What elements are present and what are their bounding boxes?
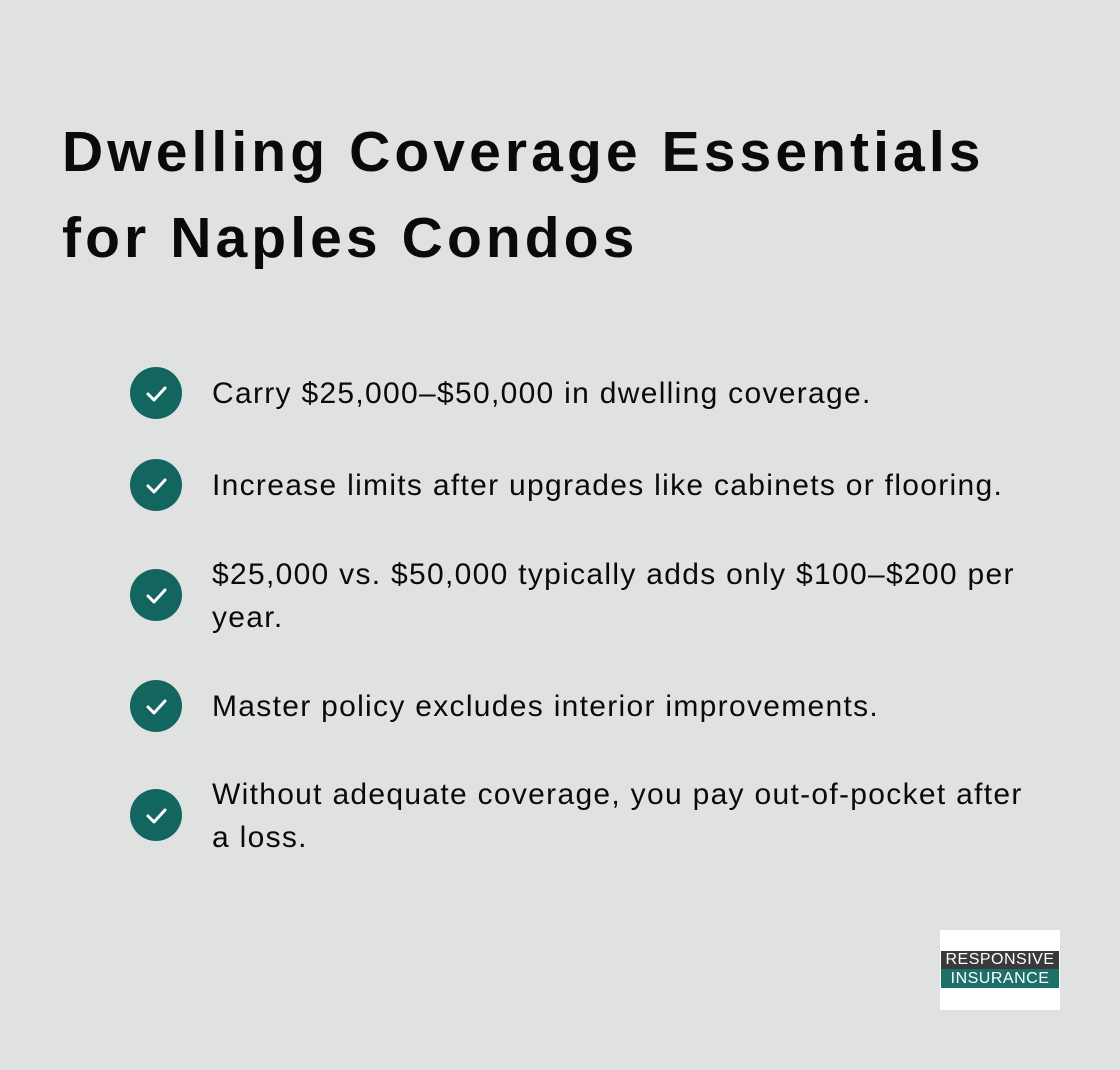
icon: check	[130, 789, 182, 841]
item 2	[130, 459, 1003, 511]
logo: RESPONSIVE	[945, 951, 1055, 968]
item 1	[130, 367, 872, 419]
item 3	[130, 558, 1015, 634]
text: Carry $25,000–$50,000 in dwelling coverage.	[212, 377, 872, 410]
icon: check	[130, 680, 182, 732]
text: Master policy excludes interior improvements.	[212, 690, 879, 723]
title: for Naples Condos	[62, 206, 638, 270]
title	[62, 120, 985, 270]
text: $25,000 vs. $50,000 typically adds only $100–$200 per year.	[212, 558, 1015, 634]
icon: check	[130, 459, 182, 511]
icon: check	[130, 569, 182, 621]
text: Without adequate coverage, you pay out-of-pocket after a loss.	[212, 778, 1023, 854]
text: Increase limits after upgrades like cabinets or flooring.	[212, 469, 1003, 502]
logo: INSURANCE	[951, 970, 1049, 987]
logo	[940, 930, 1060, 1010]
icon: check	[130, 367, 182, 419]
item 4	[130, 680, 879, 732]
title: Dwelling Coverage Essentials	[62, 120, 985, 184]
item 5	[130, 778, 1023, 854]
